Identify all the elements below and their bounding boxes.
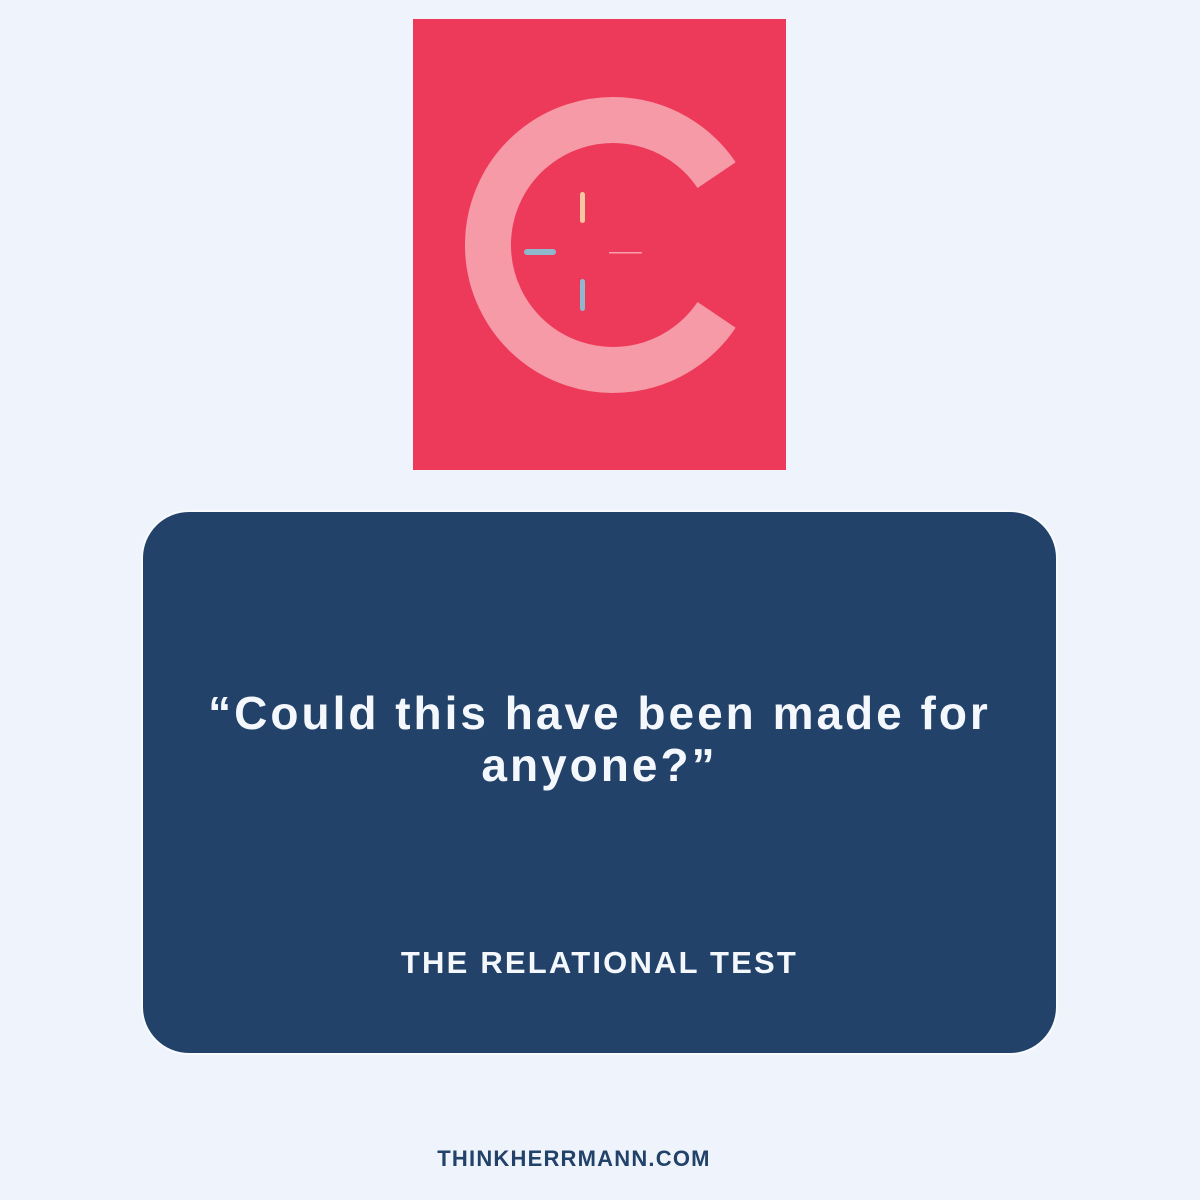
icon: C letter	[488, 120, 717, 370]
quote text: “Could this have been made for	[208, 687, 991, 739]
icon: crosshair ticks	[524, 192, 642, 311]
quote text: anyone?”	[481, 739, 718, 791]
logo panel	[413, 19, 786, 470]
footer url: THINKHERRMANN.COM	[437, 1146, 711, 1171]
quote text	[208, 687, 991, 791]
quote card	[143, 512, 1056, 1053]
subtitle: the relational test: THE RELATIONAL TEST	[401, 945, 798, 980]
